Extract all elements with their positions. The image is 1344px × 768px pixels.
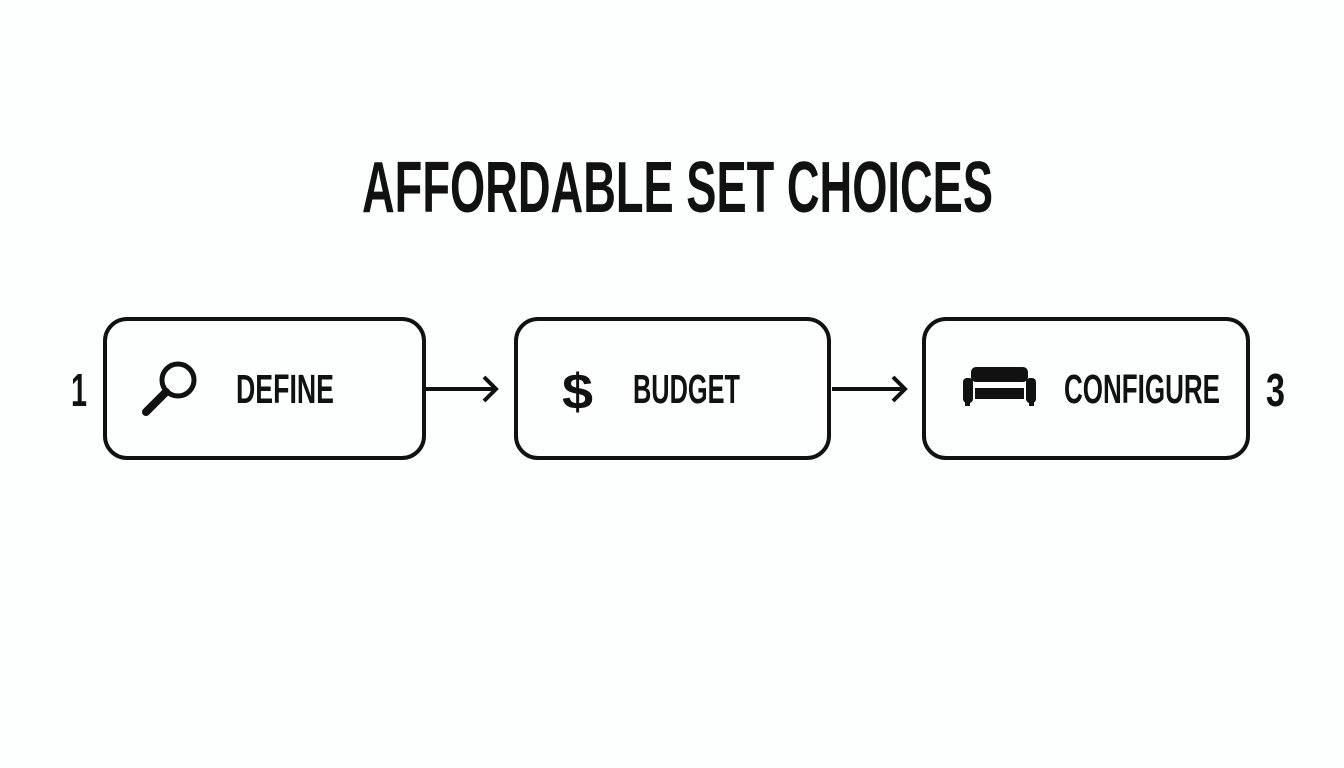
label: configure: CONFIGURE <box>1064 366 1220 412</box>
panel: define <box>105 319 424 458</box>
icon: magnifier <box>146 364 194 412</box>
panel: configure <box>924 319 1248 458</box>
step number 1: 1 <box>71 364 87 416</box>
title: AFFORDABLE SET CHOICES <box>362 148 993 228</box>
arrow 2 <box>832 377 905 401</box>
label: budget: BUDGET <box>633 366 740 412</box>
arrow 1 <box>426 377 496 401</box>
step number 3: 3 <box>1266 364 1285 416</box>
icon: dollar: $ <box>562 364 593 420</box>
panel: budget <box>516 319 829 458</box>
label: define: DEFINE <box>236 366 334 412</box>
icon: sofa <box>963 367 1036 406</box>
